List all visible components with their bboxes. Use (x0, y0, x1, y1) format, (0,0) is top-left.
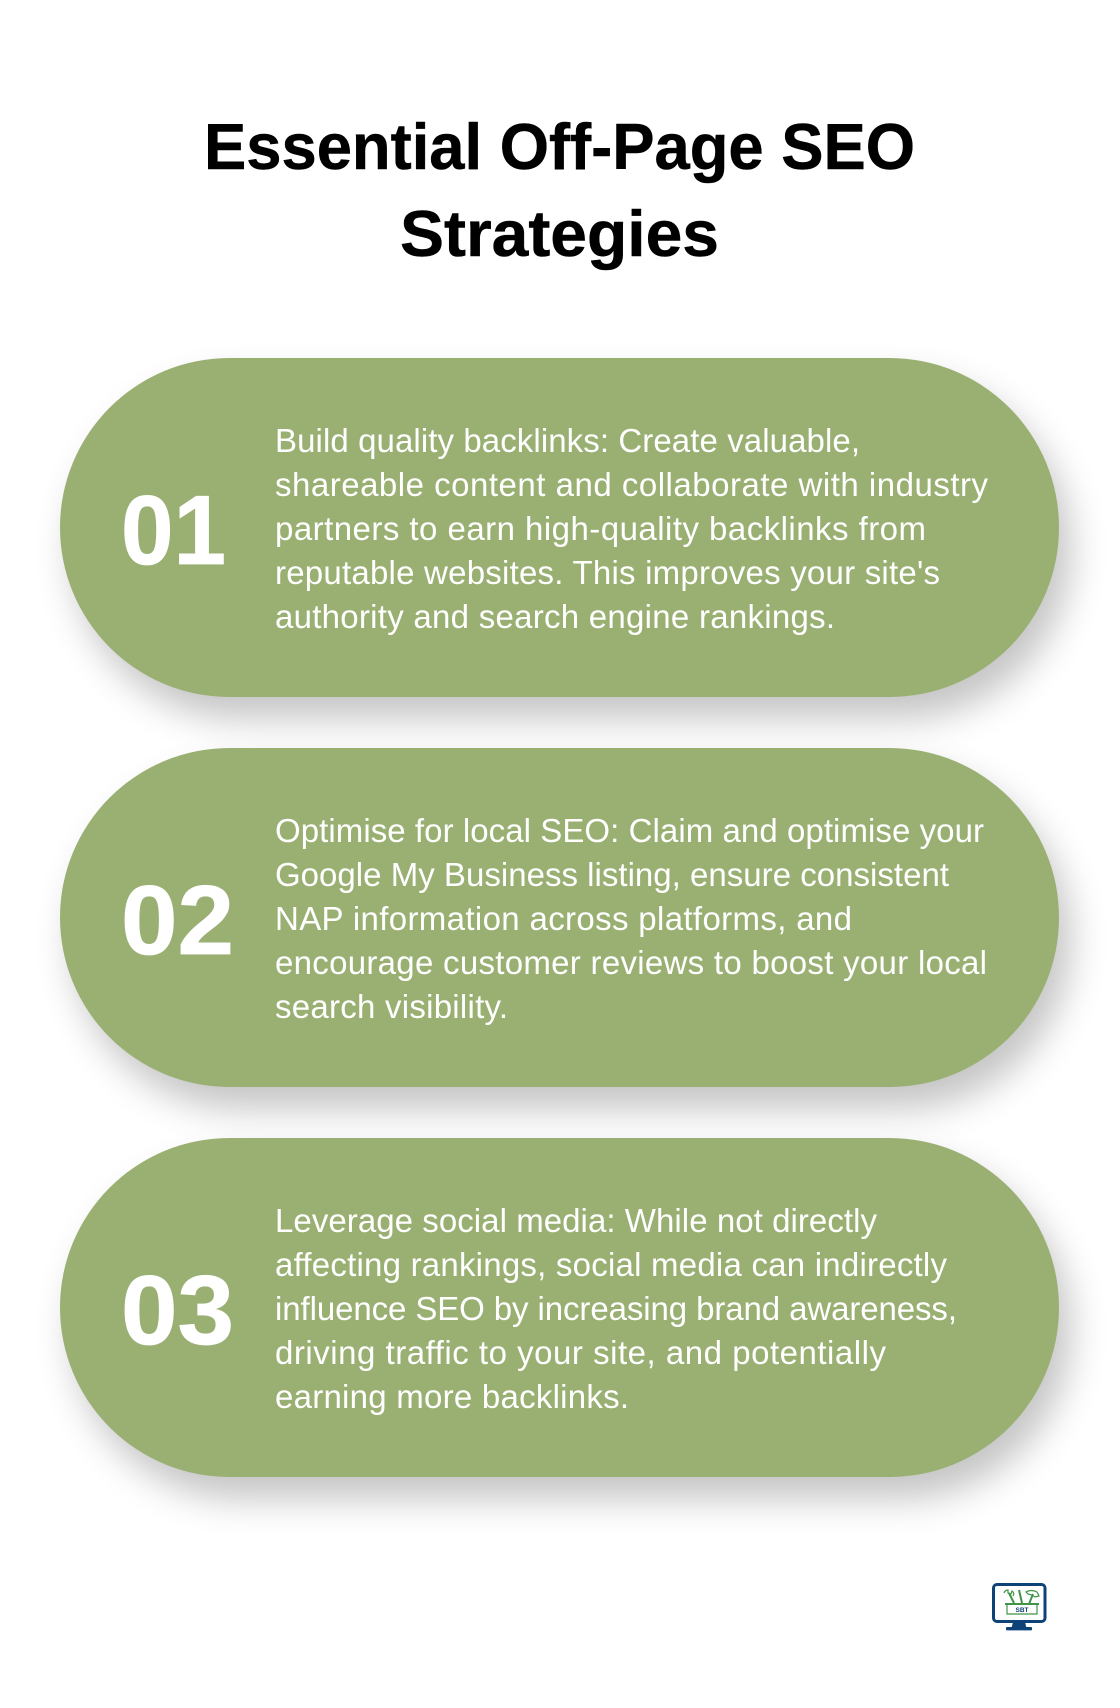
panel: leverage social media (60, 1138, 1059, 1477)
title: Strategies (400, 197, 719, 270)
text block 3: affecting rankings, social media can indirectly (275, 1246, 948, 1283)
text block 1: shareable content and collaborate with industry (275, 466, 988, 503)
text block 2: encourage customer reviews to boost your local (275, 944, 987, 981)
text block 3: earning more backlinks. (275, 1378, 629, 1415)
text block 2: NAP information across platforms, and (275, 900, 852, 937)
icon: monitor with toolbox logo: SBT (1016, 1607, 1029, 1614)
text block 2: Optimise for local SEO: Claim and optimise your (275, 812, 984, 849)
text block 3 (275, 1202, 957, 1415)
icon: monitor with toolbox logo (992, 1583, 1046, 1630)
text block 3: Leverage social media: While not directly (275, 1202, 878, 1239)
text block 2: Google My Business listing, ensure consistent (275, 856, 949, 893)
panel: optimise for local SEO (60, 748, 1059, 1087)
text block 1: reputable websites. This improves your site's (275, 554, 940, 591)
title (204, 110, 915, 270)
text block 1 (275, 422, 988, 635)
number 01: 01 (121, 475, 226, 585)
text block 1: authority and search engine rankings. (275, 598, 835, 635)
text block 3: driving traffic to your site, and potentially (275, 1334, 886, 1371)
panel: build quality backlinks (60, 358, 1059, 697)
text block 3: influence SEO by increasing brand awareness, (275, 1290, 957, 1327)
number 03: 03 (121, 1255, 234, 1365)
text block 1: Build quality backlinks: Create valuable, (275, 422, 860, 459)
number 02: 02 (121, 865, 234, 975)
text block 2 (275, 812, 987, 1025)
text block 2: search visibility. (275, 988, 508, 1025)
text block 1: partners to earn high-quality backlinks from (275, 510, 926, 547)
title: Essential Off-Page SEO (204, 110, 915, 183)
